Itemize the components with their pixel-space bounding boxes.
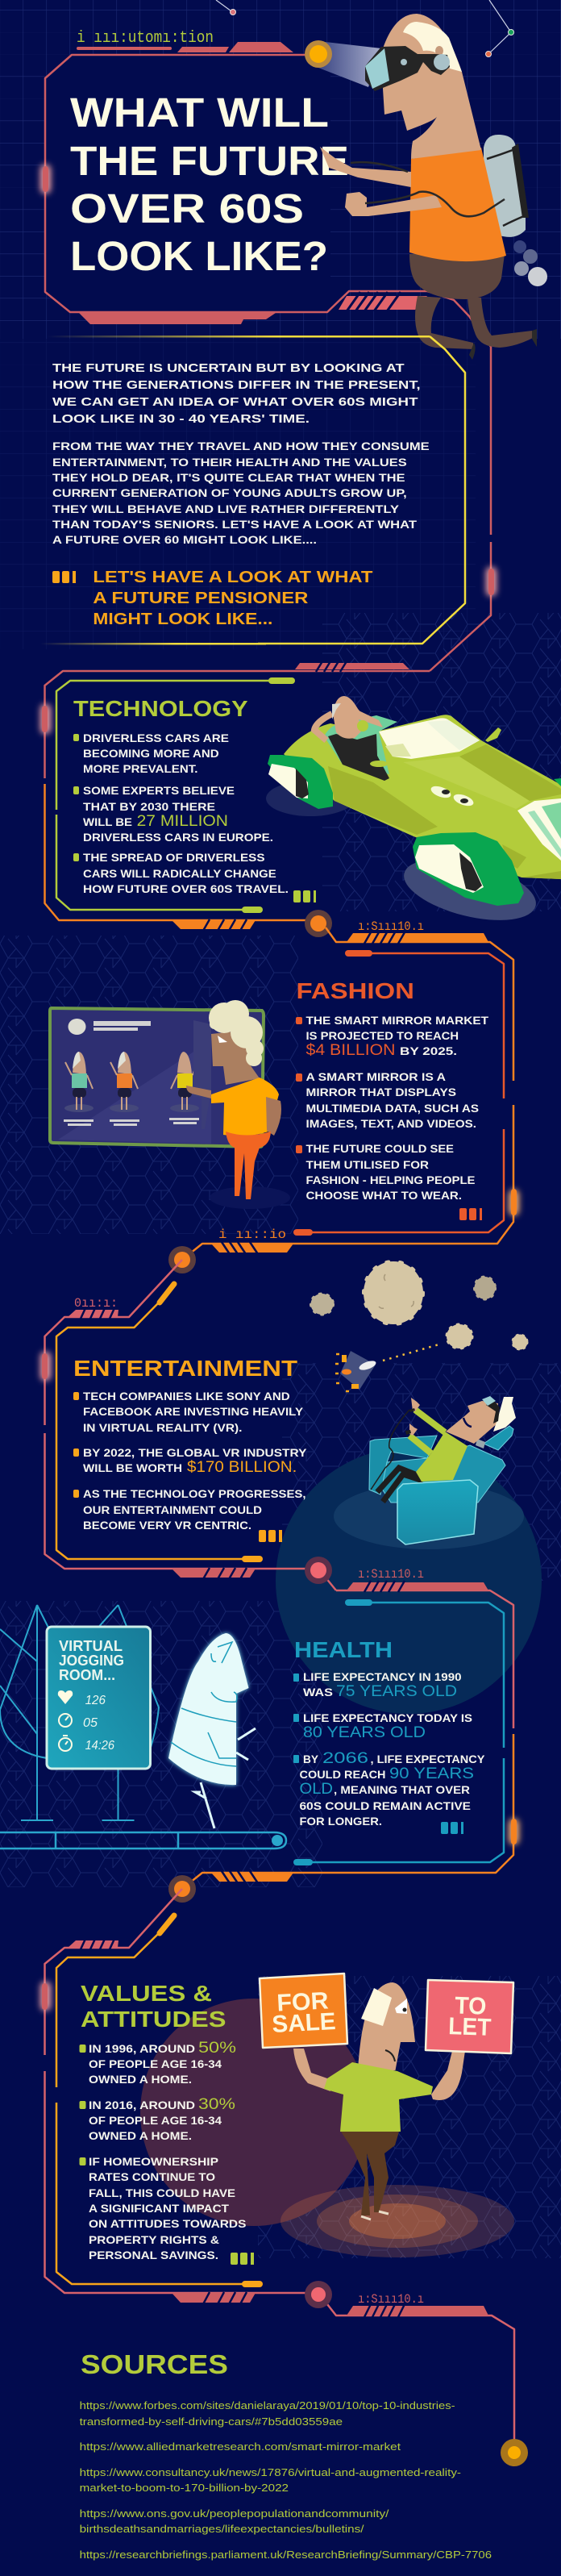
intro text: HOW THE GENERATIONS DIFFER IN THE PRESENT,	[52, 378, 421, 392]
connector: tech outer frame	[40, 661, 430, 931]
bullet list: fashion: BY 2025.	[400, 1044, 457, 1057]
bullet list: technology: BECOMING MORE AND	[83, 747, 219, 760]
bullet list: fashion: CHOOSE WHAT TO WEAR.	[306, 1189, 462, 1202]
intro text: LOOK LIKE IN 30 - 40 YEARS' TIME.	[52, 412, 310, 426]
bullet list: values and attitudes: OWNED A HOME.	[89, 2073, 192, 2086]
icon: bars	[293, 890, 316, 902]
bullet list: health: FOR LONGER.	[300, 1815, 382, 1828]
bullet list: fashion: MULTIMEDIA DATA, SUCH AS	[306, 1102, 479, 1115]
background grid	[0, 0, 561, 649]
bullet list: health: LIFE EXPECTANCY IN 1990	[303, 1670, 462, 1683]
bullet list: technology	[73, 732, 289, 895]
panel: values and attitudes	[56, 1915, 263, 2287]
bullet list: health: 90 YEARS	[389, 1765, 474, 1782]
bullet list: health: 80 YEARS OLD	[303, 1724, 426, 1741]
bullet list: health: 75 YEARS OLD	[336, 1683, 457, 1700]
bullet list: technology: CARS WILL RADICALLY CHANGE	[83, 867, 276, 880]
heading: sources: SOURCES	[81, 2349, 228, 2379]
bullet list: entertainment: AS THE TECHNOLOGY PROGRESSES,	[83, 1487, 306, 1500]
bullet list: fashion: FASHION - HELPING PEOPLE	[306, 1173, 476, 1186]
bullet list: health: OLD	[300, 1781, 333, 1798]
bullet list: values and attitudes: IN 2016, AROUND	[89, 2099, 195, 2111]
figure: orange outfit	[110, 1052, 139, 1112]
heading: technology: TECHNOLOGY	[73, 696, 248, 721]
icon: bars	[231, 2253, 254, 2265]
bullet list: values and attitudes: OF PEOPLE AGE 16-34	[89, 2057, 222, 2070]
sign: to let	[426, 1980, 513, 2053]
planet background	[276, 1448, 542, 1714]
bullet list: health: , LIFE EXPECTANCY	[371, 1753, 485, 1765]
callout: future pensioner: MIGHT LOOK LIKE...	[93, 611, 272, 628]
figure: yellow outfit	[170, 1052, 199, 1112]
bullet list: values and attitudes: A SIGNIFICANT IMPACT	[89, 2202, 229, 2215]
brand label: i ııı:utomı:tion	[77, 29, 214, 48]
constellation decorations	[216, 0, 514, 56]
title frame	[40, 42, 491, 671]
illustration: woman at mirror	[186, 1000, 281, 1199]
sign: for sale: FOR	[276, 1987, 330, 2017]
bullet list: health: 60S COULD REMAIN ACTIVE	[300, 1799, 471, 1812]
sources	[80, 2349, 492, 2561]
code label: fashion bottom: i ıı::io	[218, 1228, 286, 1242]
bullet list: technology: WILL BE	[83, 815, 132, 828]
panel: fashion	[293, 950, 504, 1236]
heading: values and attitudes: ATTITUDES	[81, 2007, 226, 2032]
heading: values and attitudes	[81, 1981, 226, 2032]
bullet list: entertainment: TECH COMPANIES LIKE SONY AND	[83, 1390, 290, 1403]
connector: fashion outer frame	[182, 927, 519, 1260]
title: WHAT WILL	[70, 90, 329, 135]
bullet list: values and attitudes: OF PEOPLE AGE 16-34	[89, 2114, 222, 2127]
bullet list: fashion: THE SMART MIRROR MARKET	[306, 1014, 488, 1027]
bullet list: health: BY	[303, 1753, 319, 1765]
bullet list: values and attitudes: IN 1996, AROUND	[89, 2042, 195, 2055]
panel: virtual jogging room: ROOM...	[59, 1667, 115, 1683]
illustration: virtual trees and treadmill	[0, 1605, 286, 1849]
intro text: FROM THE WAY THEY TRAVEL AND HOW THEY CONSUME	[52, 440, 430, 452]
bullet list: health: LIFE EXPECTANCY TODAY IS	[303, 1711, 472, 1724]
source links: market-to-boom-to-170-billion-by-2022	[80, 2482, 289, 2494]
bullet list: values and attitudes: IF HOMEOWNERSHIP	[89, 2155, 218, 2168]
illustration: driverless car	[266, 696, 561, 932]
connector: health outer frame	[168, 1581, 519, 1903]
source links: birthsdeathsandmarriages/lifeexpectancies/bulletins/	[80, 2523, 364, 2535]
sign: to let: TO	[455, 1992, 487, 2020]
code label: entertainment top: 0ıı:ı:	[74, 1296, 118, 1311]
source links: https://researchbriefings.parliament.uk/ResearchBriefing/Summary/CBP-7706	[80, 2549, 492, 2561]
bullet list: technology: 27 MILLION	[137, 813, 228, 830]
bullet list: values and attitudes: 30%	[198, 2096, 235, 2113]
panel: virtual jogging room: JOGGING	[59, 1653, 124, 1669]
heading: fashion: FASHION	[297, 978, 414, 1003]
bullet list: entertainment: FACEBOOK ARE INVESTING HEAVILY	[83, 1405, 304, 1418]
bullet list: fashion: IS PROJECTED TO REACH	[306, 1029, 459, 1042]
spotlight ellipses	[280, 2185, 514, 2257]
bullet list: technology: DRIVERLESS CARS IN EUROPE.	[83, 831, 273, 844]
icon: heart	[58, 1690, 73, 1704]
intro text: WE CAN GET AN IDEA OF WHAT OVER 60S MIGHT	[52, 395, 418, 409]
bullet list: values and attitudes: OWNED A HOME.	[89, 2129, 192, 2142]
intro text: CURRENT GENERATION OF YOUNG ADULTS GROW UP,	[52, 486, 407, 499]
callout: future pensioner: LET'S HAVE A LOOK AT WHAT	[93, 569, 372, 586]
title: LOOK LIKE?	[70, 233, 328, 279]
outer frame: entertainment	[40, 1246, 336, 1590]
bullet list: technology: THE SPREAD OF DRIVERLESS	[83, 851, 264, 864]
bullet list: health: 2066	[322, 1750, 368, 1767]
bullet list: fashion: IMAGES, TEXT, AND VIDEOS.	[306, 1117, 476, 1130]
bullet list: fashion: THEM UTILISED FOR	[306, 1158, 429, 1171]
title: OVER 60S	[70, 185, 304, 231]
title	[70, 90, 349, 279]
code label: fashion top: ı:Sııı10.ı	[358, 919, 424, 934]
bullet list: entertainment: OUR ENTERTAINMENT COULD	[83, 1503, 262, 1516]
intro text: THAN TODAY'S SENIORS. LET'S HAVE A LOOK AT WHAT	[52, 518, 418, 531]
bullet list: technology: THAT BY 2030 THERE	[83, 800, 215, 813]
bullet list: values and attitudes: ON ATTITUDES TOWARDS	[89, 2217, 246, 2230]
illustration: hologram jogger	[168, 1633, 256, 1828]
heading: values and attitudes: VALUES &	[81, 1981, 212, 2006]
bullet list: health: WAS	[303, 1686, 333, 1699]
source links	[80, 2399, 492, 2561]
metric: distance: 05	[83, 1716, 98, 1730]
source links: https://www.ons.gov.uk/peoplepopulationandcommunity/	[80, 2507, 389, 2520]
bullet list: fashion: A SMART MIRROR IS A	[306, 1070, 446, 1083]
intro text: THE FUTURE IS UNCERTAIN BUT BY LOOKING AT	[52, 361, 405, 375]
illustration: man holding signs	[260, 1974, 513, 2220]
bullet list: entertainment: BECOME VERY VR CENTRIC.	[83, 1519, 251, 1532]
illustration: man with VR goggles and jetpack	[305, 14, 547, 360]
source links: https://www.alliedmarketresearch.com/smart-mirror-market	[80, 2441, 401, 2453]
bullet list: fashion: $4 BILLION	[306, 1042, 395, 1059]
intro panel frame	[40, 336, 497, 645]
background circle: values	[140, 1999, 368, 2226]
bullet list: health: , MEANING THAT OVER	[334, 1783, 470, 1796]
icon: spaceship with laser dots	[335, 1344, 442, 1391]
code label: values bottom: ı:Sııı10.ı	[358, 2292, 424, 2307]
icon: bars	[259, 1530, 282, 1542]
heading: entertainment: ENTERTAINMENT	[73, 1356, 297, 1381]
sign: to let: LET	[448, 2013, 492, 2041]
bullet list: technology: MORE PREVALENT.	[83, 762, 198, 775]
bullet list: fashion: THE FUTURE COULD SEE	[306, 1142, 454, 1155]
bullet list: values and attitudes: PERSONAL SAVINGS.	[89, 2249, 218, 2261]
bullet list: entertainment: WILL BE WORTH	[83, 1461, 182, 1474]
intro text: ENTERTAINMENT, TO THEIR HEALTH AND THE VALUES	[52, 456, 407, 469]
illustration: VR armchair	[334, 1396, 524, 1549]
icon: clock	[59, 1714, 72, 1727]
sign: for sale	[260, 1974, 347, 2048]
hair	[209, 1000, 264, 1066]
code label: entertainment bottom: ı:Sııı10.ı	[358, 1567, 424, 1582]
bullet list: values and attitudes: PROPERTY RIGHTS &	[89, 2233, 219, 2246]
bullet list: technology: HOW FUTURE OVER 60S TRAVEL.	[83, 882, 289, 895]
icon: bars	[459, 1208, 482, 1220]
metric: time: 14:26	[85, 1739, 114, 1753]
figure: mint outfit	[64, 1052, 94, 1112]
bullet list: values and attitudes: FALL, THIS COULD HAVE	[89, 2186, 235, 2199]
bullet list: entertainment: IN VIRTUAL REALITY (VR).	[83, 1421, 242, 1434]
metric: heart rate: 126	[85, 1694, 106, 1707]
panel: entertainment	[56, 1284, 307, 1562]
intro text	[52, 361, 430, 546]
bullet list: entertainment: $170 BILLION.	[187, 1459, 297, 1476]
panel: technology	[56, 677, 316, 913]
intro text: THEY HOLD DEAR, IT'S QUITE CLEAR THAT WHEN THE	[52, 471, 405, 484]
bullet list: values and attitudes: RATES CONTINUE TO	[89, 2170, 215, 2183]
bullet list: values and attitudes: 50%	[198, 2040, 236, 2057]
bullet list: entertainment: BY 2022, THE GLOBAL VR INDUSTRY	[83, 1446, 307, 1459]
icon: stopwatch	[59, 1736, 72, 1751]
callout: future pensioner: A FUTURE PENSIONER	[93, 590, 309, 607]
end node	[501, 2439, 528, 2466]
bullet list: technology: SOME EXPERTS BELIEVE	[83, 784, 235, 797]
panel: virtual jogging room	[47, 1627, 150, 1769]
bullet list: fashion	[296, 1014, 488, 1202]
bullet list: health	[293, 1670, 485, 1828]
bullet list: technology: DRIVERLESS CARS ARE	[83, 732, 229, 744]
panel: health	[293, 1599, 504, 1865]
title: THE FUTURE	[70, 138, 349, 184]
bullet list: values and attitudes	[79, 2040, 246, 2261]
intro text: THEY WILL BEHAVE AND LIVE RATHER DIFFERENTLY	[52, 502, 400, 515]
connector: values outer frame	[40, 1889, 514, 2441]
sign: for sale: SALE	[272, 2008, 336, 2038]
illustration: smart mirror	[50, 1008, 290, 1209]
icon: bars	[441, 1822, 463, 1834]
panel: virtual jogging room: VIRTUAL	[59, 1638, 123, 1654]
intro text: A FUTURE OVER 60 MIGHT LOOK LIKE....	[52, 533, 317, 546]
connector node: technology to fashion	[305, 910, 332, 937]
callout: future pensioner	[52, 569, 372, 628]
asteroids	[311, 1261, 527, 1350]
bullet list: entertainment	[73, 1390, 307, 1532]
source links: https://www.forbes.com/sites/danielaraya/2019/01/10/top-10-industries-	[80, 2399, 455, 2411]
hexagon background patterns	[0, 613, 561, 2258]
source links: transformed-by-self-driving-cars/#7b5dd03559ae	[80, 2416, 343, 2428]
source links: https://www.consultancy.uk/news/17876/virtual-and-augmented-reality-	[80, 2466, 461, 2478]
bullet list: fashion: MIRROR THAT DISPLAYS	[306, 1086, 456, 1098]
heading: health: HEALTH	[294, 1637, 393, 1662]
bullet list: health: COULD REACH	[300, 1768, 385, 1781]
